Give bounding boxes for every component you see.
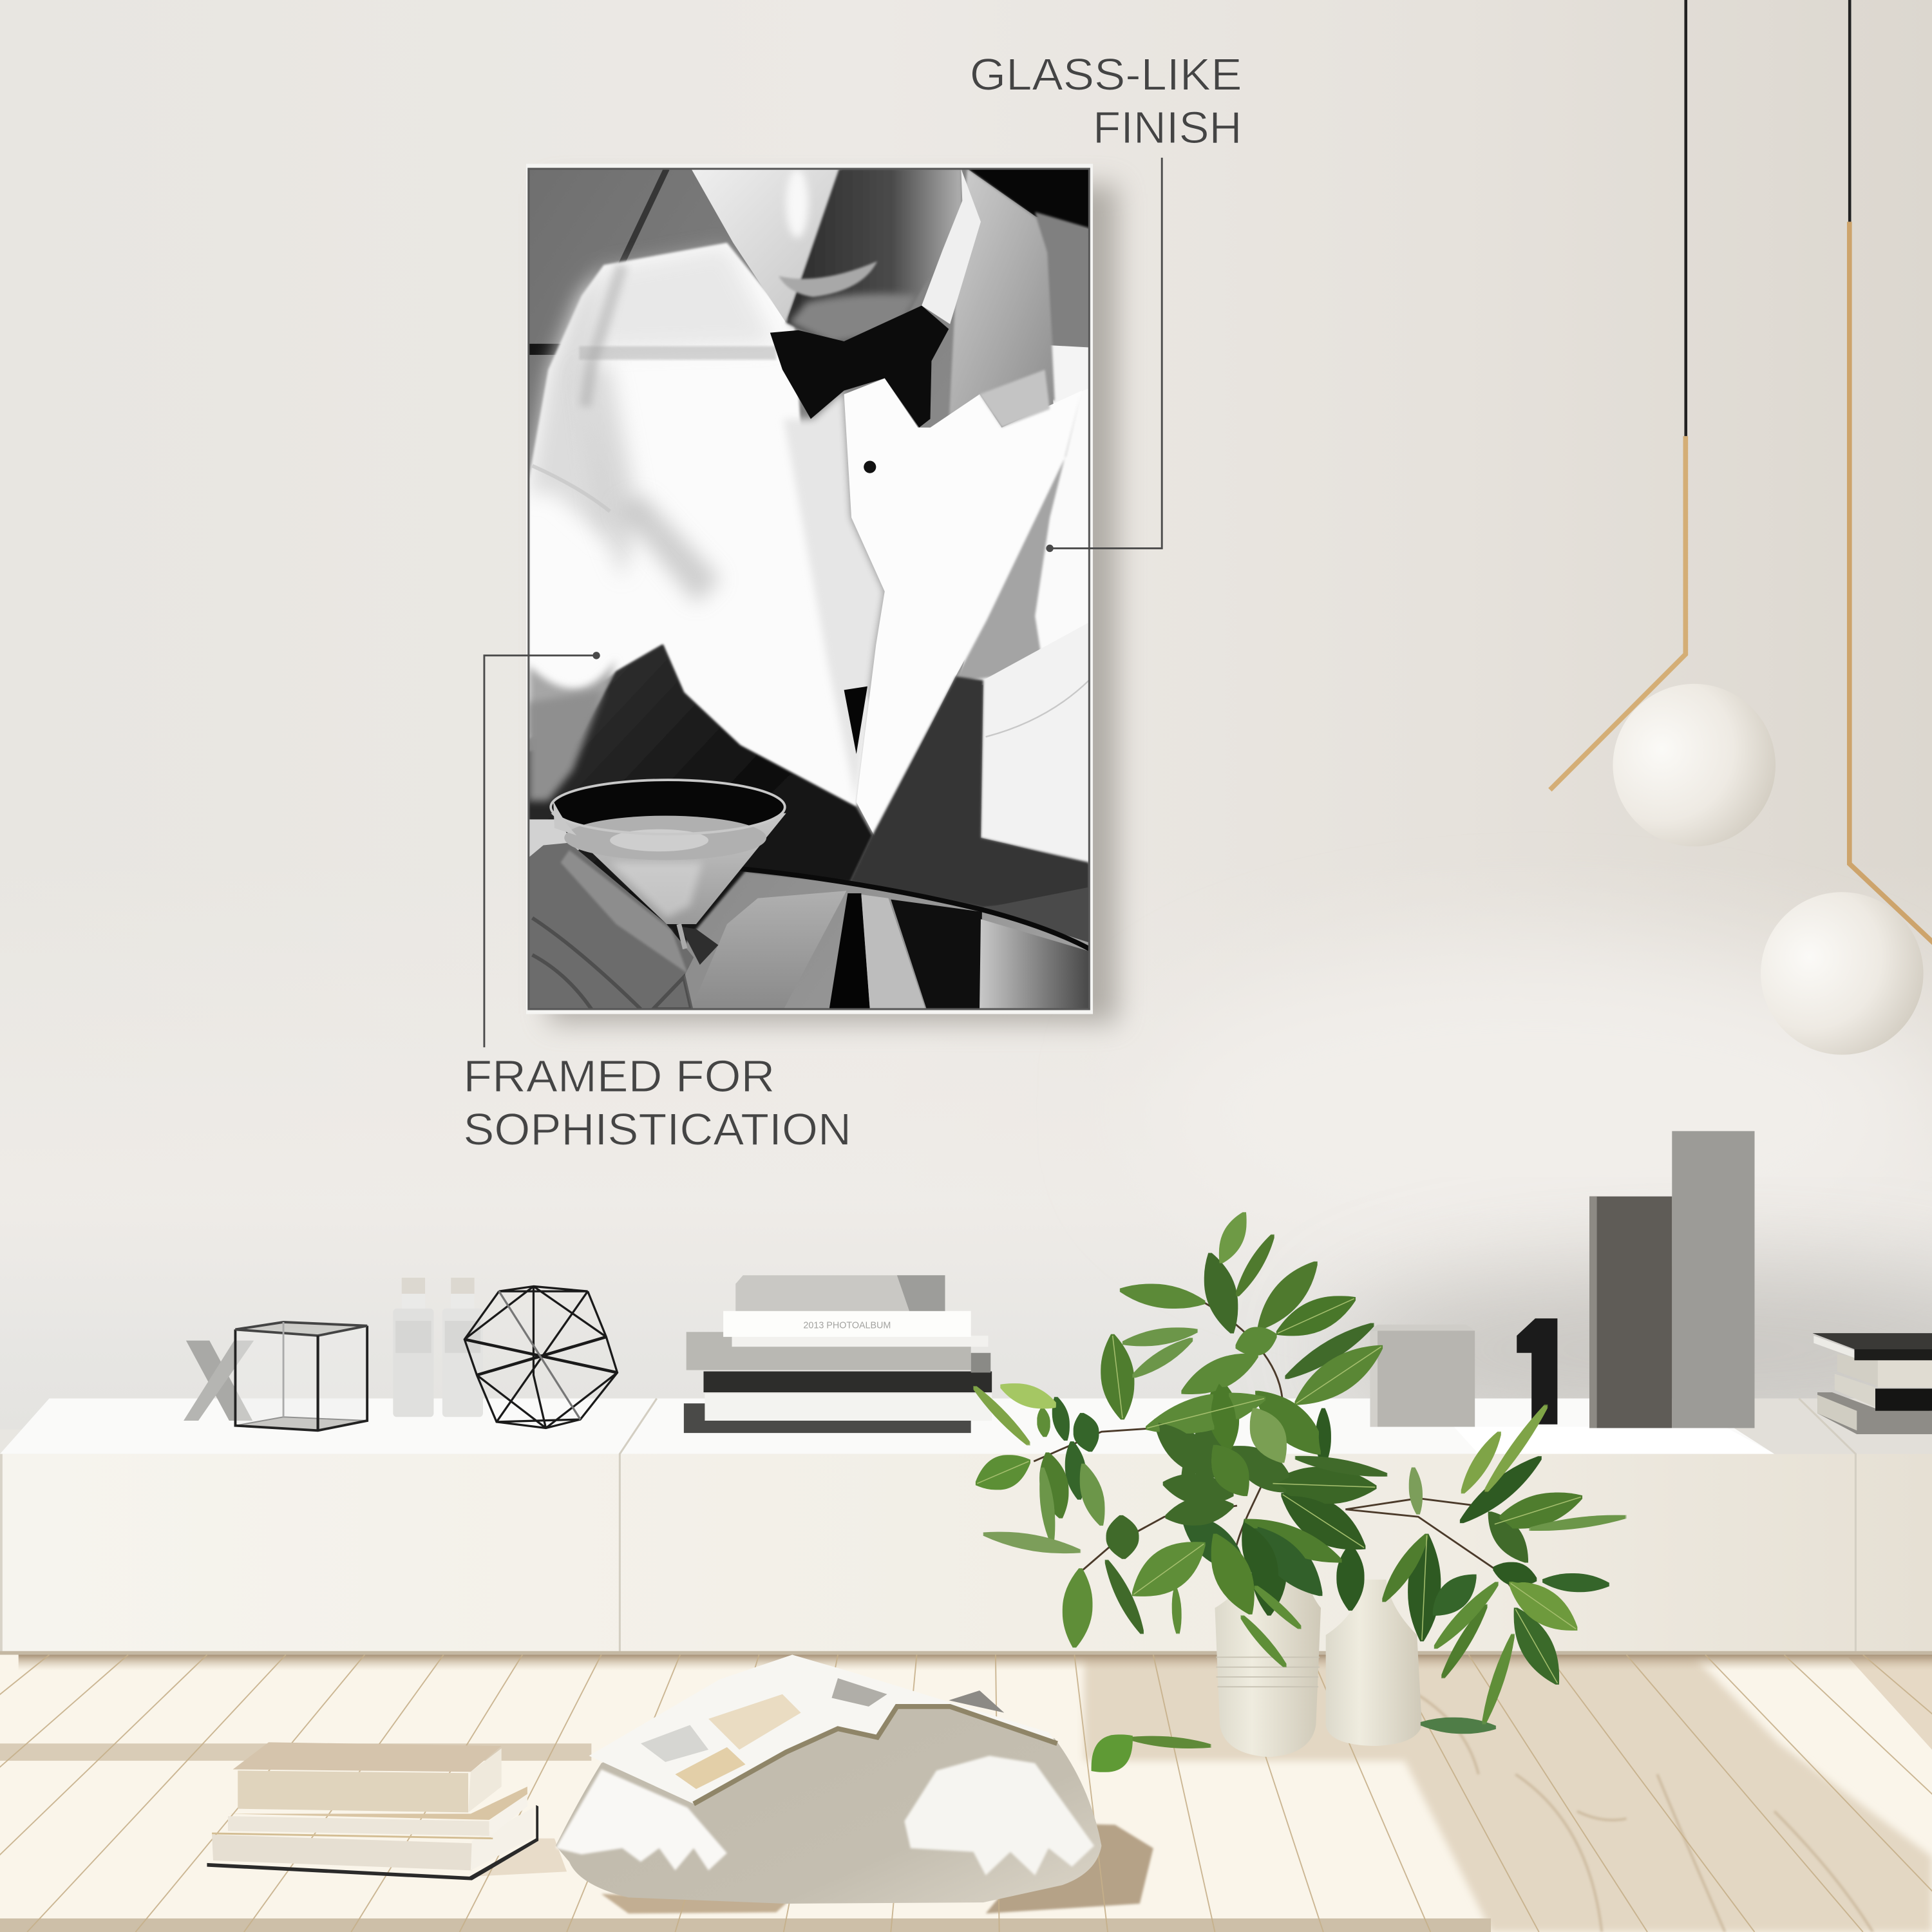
right jacket body white: [955, 388, 1089, 690]
callout: framed for sophistication: SOPHISTICATION: [463, 1104, 851, 1154]
dark and grey tall vases: [1589, 1131, 1754, 1428]
letter X ornament: [184, 1341, 254, 1421]
pendant lamp right: [1761, 0, 1932, 1055]
frame shadow: [548, 185, 1117, 1023]
lapel shadow wedge: [955, 394, 1081, 680]
pendant lamp left: [1550, 0, 1776, 846]
books at right: [1812, 1333, 1932, 1434]
stack of books on cabinet: 2013 PHOTOALBUM: [803, 1320, 891, 1331]
callout: framed for sophistication: FRAMED FOR: [463, 1051, 775, 1101]
left jacket: [529, 243, 869, 807]
face shadow: [786, 169, 962, 344]
geometric wire sculpture: [464, 1286, 618, 1428]
grey cube: [1370, 1325, 1475, 1427]
right lapel and shirt panel: [844, 378, 1082, 837]
collar: [922, 169, 981, 324]
photo border: [529, 169, 1089, 1009]
magazine: [589, 1655, 1057, 1804]
floor: [0, 1654, 1932, 1932]
stack of books on cabinet: [684, 1275, 992, 1433]
white sideboard cabinet: [0, 1399, 1932, 1655]
shoulder: [949, 169, 1055, 425]
right pocket: [981, 622, 1089, 865]
books on floor: [207, 1742, 538, 1880]
cuff and hand: [529, 819, 579, 862]
photo: man in white tuxedo with martini: [529, 169, 1089, 1010]
plant branches with green leaves: [974, 1214, 1625, 1770]
shirt stud: [864, 461, 876, 473]
dark shadow right: [850, 676, 1089, 908]
right arm: [1035, 212, 1089, 350]
callout: glass-like finish: GLASS-LIKE: [970, 50, 1242, 100]
floor pillow with open magazine: [556, 1655, 1101, 1904]
callout: glass-like finish: [970, 50, 1242, 552]
table edge: [739, 869, 1089, 949]
reflection streaks: [579, 346, 776, 360]
two glass bottles: [393, 1278, 483, 1417]
framed artwork: [526, 164, 1117, 1023]
martini glass: [551, 813, 786, 924]
shirt centre: [784, 391, 885, 802]
face light: [691, 169, 843, 323]
table reflections: [691, 891, 846, 1009]
number one ornament: [1517, 1318, 1557, 1425]
dark shadow left: [529, 645, 873, 1010]
callout: framed for sophistication: [463, 652, 851, 1154]
white frame: [526, 164, 1093, 1014]
glass lantern: [235, 1322, 367, 1430]
callout: glass-like finish: FINISH: [1093, 102, 1242, 153]
bow tie: [770, 305, 949, 428]
ceramic vases: [1215, 1577, 1422, 1757]
